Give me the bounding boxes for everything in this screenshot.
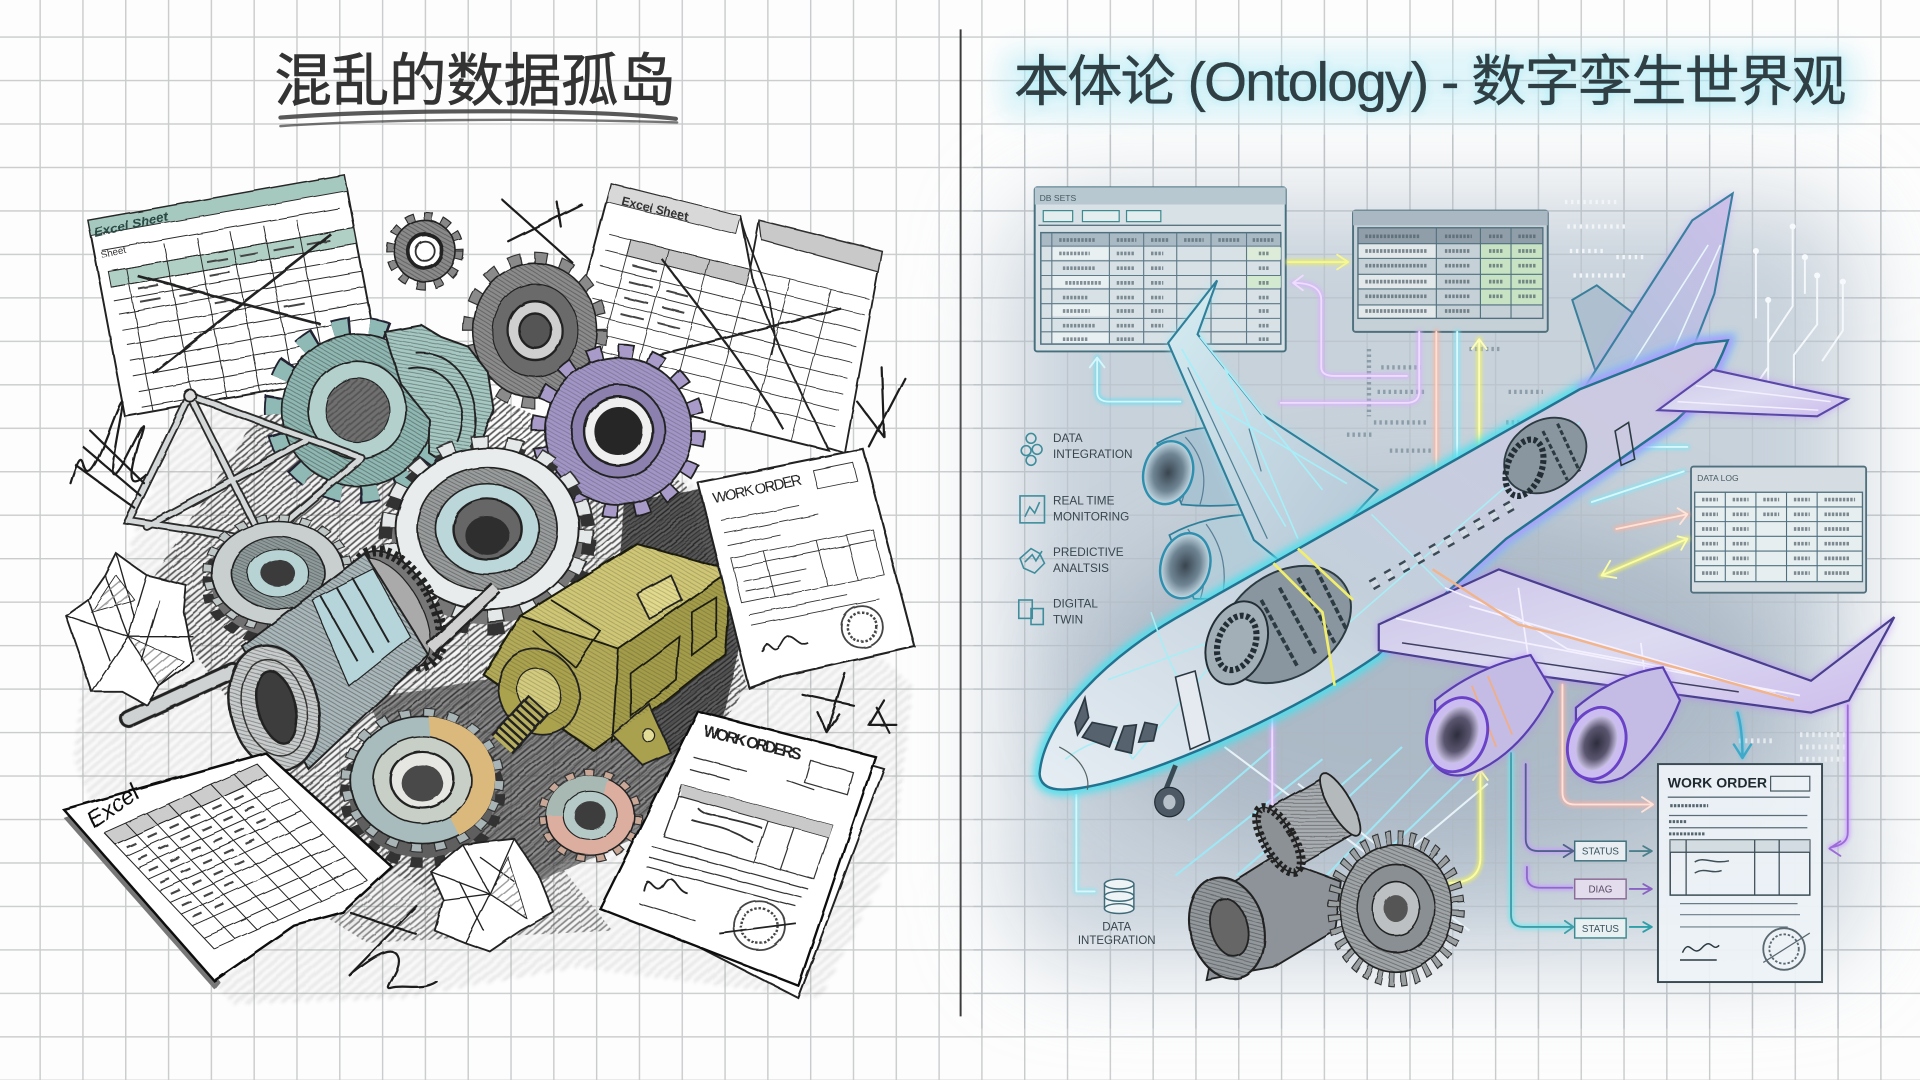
legend: data integration: INTEGRATION bbox=[1053, 448, 1132, 461]
database icon with label: INTEGRATION bbox=[1078, 935, 1156, 947]
near wing bbox=[1379, 569, 1894, 713]
crumpled paper, left bbox=[66, 553, 193, 705]
legend: real time monitoring: MONITORING bbox=[1053, 510, 1129, 523]
table: status matrix bbox=[1353, 211, 1548, 332]
horizontal stabilizer bbox=[1658, 370, 1848, 416]
blue gray atmospheric glow bbox=[1010, 202, 1855, 961]
legend: predictive analysis: PREDICTIVE bbox=[1053, 546, 1124, 559]
neon data flow connectors bbox=[1076, 255, 1848, 933]
hand drawn title underline bbox=[280, 111, 677, 126]
physical parts: cylinder and gear bbox=[1178, 767, 1467, 989]
exposed internal engine, rear bbox=[1490, 402, 1601, 509]
cylinder coupling with rod bbox=[129, 536, 459, 780]
window title: DB SETS bbox=[1040, 193, 1077, 203]
large pale gear bbox=[389, 443, 585, 626]
small pink gear bbox=[544, 774, 637, 857]
legend: predictive analysis: ANALTSIS bbox=[1053, 562, 1109, 575]
airplane digital twin bbox=[1040, 193, 1894, 817]
feature legend bbox=[1019, 432, 1132, 626]
illustration: pile of parts and papers bbox=[64, 175, 915, 1004]
work order document bbox=[1658, 764, 1822, 982]
divider line between panels bbox=[960, 29, 962, 1016]
vertical tail bbox=[1575, 193, 1733, 403]
excel sheet, top left: Sheet bbox=[100, 245, 127, 261]
landing gear bbox=[1155, 765, 1184, 817]
status tags: DIAG bbox=[1588, 885, 1612, 896]
work orders heading: WORK ORDERS bbox=[702, 723, 803, 764]
window title: DATA LOG bbox=[1697, 473, 1739, 483]
pen scribbles and crossings bbox=[71, 200, 905, 989]
far engines bbox=[1136, 427, 1292, 604]
crumpled paper, bottom bbox=[431, 839, 553, 951]
panel: ontology digital twin (right) bbox=[973, 47, 1894, 1029]
teal gear bbox=[274, 327, 441, 493]
legend: predictive analysis bbox=[1020, 546, 1124, 575]
database icon with label bbox=[1078, 879, 1156, 947]
small gray gear bbox=[392, 218, 458, 284]
cockpit windows bbox=[1075, 698, 1157, 753]
near engines bbox=[1417, 655, 1680, 787]
document heading: WORK ORDER bbox=[1668, 774, 1767, 790]
excel heading: Excel bbox=[82, 779, 144, 833]
legend: digital twin: DIGITAL bbox=[1053, 597, 1098, 610]
gray teal gear bbox=[209, 520, 347, 638]
title: 本体论 (Ontology) - 数字孪生世界观: 本体论 (Ontology) - 数字孪生世界观 bbox=[1014, 50, 1847, 112]
work order sheet, right bbox=[698, 449, 915, 688]
metal triangular bracket bbox=[129, 389, 361, 541]
panel: chaotic data silos (left) bbox=[64, 49, 915, 1004]
status tags bbox=[1575, 841, 1626, 938]
cockpit door bbox=[1176, 671, 1210, 749]
exposed internal engine, front bbox=[1194, 542, 1373, 707]
sheet title: Excel Sheet bbox=[620, 194, 690, 224]
olive gearbox bbox=[431, 544, 731, 765]
status tags: STATUS bbox=[1582, 924, 1619, 935]
excel sheet, top left bbox=[88, 175, 381, 416]
ground projection lines under the plane bbox=[1176, 747, 1488, 931]
work orders stack, bottom right bbox=[600, 711, 884, 998]
legend: real time monitoring bbox=[1020, 494, 1129, 523]
purple gear bbox=[540, 353, 697, 509]
rear door bbox=[1615, 422, 1635, 465]
big graphite gear bbox=[470, 260, 600, 402]
data dots and circuit traces bbox=[1347, 202, 1849, 759]
excel sheet, bottom left bbox=[64, 753, 392, 989]
legend: real time monitoring: REAL TIME bbox=[1053, 494, 1115, 507]
legend: digital twin bbox=[1019, 597, 1098, 626]
legend: data integration bbox=[1021, 432, 1132, 465]
database icon with label: DATA bbox=[1102, 922, 1132, 934]
status tags: STATUS bbox=[1582, 847, 1619, 858]
table: data log bbox=[1691, 467, 1866, 593]
far stabilizer bbox=[1572, 285, 1641, 375]
legend: data integration: DATA bbox=[1053, 432, 1083, 445]
excel sheet, top right, with folded second page bbox=[558, 184, 882, 453]
table: data sets bbox=[1035, 187, 1286, 351]
passenger windows bbox=[1371, 504, 1513, 585]
title: 混乱的数据孤岛: 混乱的数据孤岛 bbox=[274, 49, 676, 113]
connector glow layer bbox=[1076, 262, 1848, 927]
orange teal gear bbox=[347, 713, 498, 860]
connector core layer bbox=[1076, 255, 1848, 933]
pencil hatching under the pile bbox=[73, 367, 912, 1004]
legend: digital twin: TWIN bbox=[1053, 613, 1083, 626]
title glow bbox=[998, 47, 1861, 120]
sheet title: Excel Sheet bbox=[93, 209, 170, 240]
fuselage bbox=[1040, 340, 1728, 790]
work order heading: WORK ORDER bbox=[711, 473, 803, 507]
far wing bbox=[1168, 280, 1378, 576]
broken teal gear fragment bbox=[382, 303, 515, 476]
